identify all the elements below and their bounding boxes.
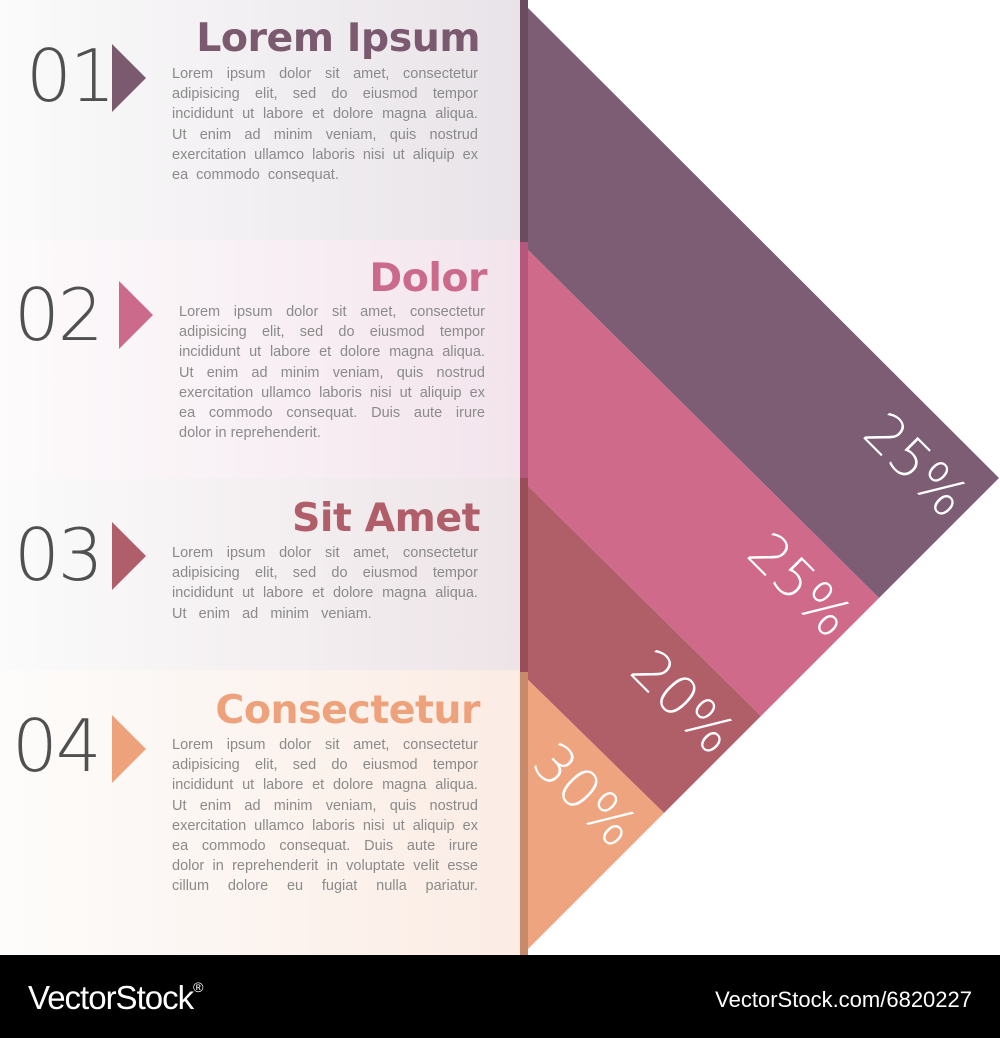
text 03: labore [263,585,303,601]
text 03: dolore [333,585,373,601]
text 01: do [331,86,348,102]
text 01: Lorem [172,66,213,82]
text 02: magna [389,344,433,360]
text 04: dolore [333,777,373,793]
text 04: enim [200,798,231,814]
text 02: tempor [440,324,485,340]
text 02: laboris [319,385,362,401]
text 04: eu [287,878,303,894]
stripe: pink 25%: 25% [735,520,865,650]
arrow 01 [112,44,146,112]
text 02: eiusmod [370,324,425,340]
text 02: enim [207,365,238,381]
text 04: ex [463,818,478,834]
stripe: brown 20% [520,478,761,813]
text 03: magna [382,585,426,601]
text 04: consequat. [279,838,350,854]
text 01: et [312,106,324,122]
text 04: Ut [172,798,186,814]
text 01: tempor [433,86,478,102]
text 04: consectetur [403,737,478,753]
panel: 03 [0,478,521,670]
text 02: ut [249,344,261,360]
text 04: cillum [172,878,209,894]
title 04: Consectetur [215,687,480,733]
text 04: nostrud [430,798,478,814]
text 04: sed [293,757,316,773]
text 04: fugiat [322,878,357,894]
title 01: Lorem Ipsum [196,15,480,61]
text 01: ad [244,127,261,143]
text 02: commodo [209,405,273,421]
text 04: exercitation [172,818,246,834]
text 04: in [213,858,224,874]
text 04: in [327,858,338,874]
text 02: incididunt [179,344,240,360]
text 01: ullamco [254,147,304,163]
footer url: VectorStock.com/6820227 [715,987,972,1012]
text 03: adipisicing [172,565,240,581]
text 02: quis [397,365,423,381]
panel: 04 [0,670,521,955]
stripe: pink 25% [520,242,879,716]
text 01: eiusmod [363,86,418,102]
text 04: nisi [363,818,385,834]
text 01: ea commodo consequat. [172,167,339,183]
text 04 [172,737,478,894]
text 04: dolor [172,858,204,874]
text 04: reprehenderit [232,858,318,874]
text 04: ullamco [254,818,304,834]
stripe: brown 20%: 20% [618,637,748,767]
number 01: 01 [26,34,114,118]
text 03: sed [293,565,316,581]
text 01: labore [263,106,303,122]
text 04: ea [172,838,188,854]
footer brand: VectorStock® [28,979,202,1016]
text 04: sit [325,737,339,753]
text 01: sed [293,86,316,102]
text 04: veniam, [326,798,376,814]
text 01: enim [200,127,231,143]
text 01: dolor [279,66,311,82]
text 03: sit [325,545,339,561]
text 03: do [331,565,348,581]
text 04: ad [244,798,261,814]
text 02: ullamco [261,385,311,401]
text 01: minim [274,127,312,143]
text 03: consectetur [403,545,478,561]
text 02: do [338,324,355,340]
text 02: ea [179,405,195,421]
text 01: veniam, [326,127,376,143]
text 04: et [312,777,324,793]
text 02: veniam, [333,365,383,381]
text 02: dolor in reprehenderit. [179,425,321,441]
text 04: laboris [312,818,355,834]
text 03: tempor [433,565,478,581]
text 01 [172,66,478,183]
text 04: dolore [228,878,268,894]
title 02: Dolor [369,255,487,301]
text 02: aliquip [420,385,462,401]
text 04: commodo [202,838,266,854]
text 04: labore [263,777,303,793]
text 04: dolor [279,737,311,753]
title 03: Sit Amet [292,495,480,541]
text 04: Lorem [172,737,213,753]
text 04: tempor [433,757,478,773]
footer [0,955,1000,1038]
text 02: dolor [286,304,318,320]
text 02: Duis [371,405,400,421]
text 01: nostrud [430,127,478,143]
text 02: Ut [179,365,194,381]
text 02: et [319,344,331,360]
text 01: exercitation [172,147,246,163]
text 04: ipsum [227,737,265,753]
text 04: minim [274,798,312,814]
text 01: incididunt [172,106,233,122]
text 01: sit [325,66,339,82]
text 04: pariatur. [426,878,478,894]
arrow 02 [119,281,153,349]
text 03: incididunt [172,585,233,601]
text 02: ut [400,385,412,401]
text 04: Duis [364,838,393,854]
text 01: dolore [333,106,373,122]
stripe: orange 30%: 30% [520,730,650,860]
text 04: adipisicing [172,757,240,773]
text 01: quis [390,127,416,143]
text 01: ex [463,147,478,163]
text 02: ex [470,385,485,401]
text 02: amet, [360,304,396,320]
text 02: consectetur [410,304,485,320]
text 01: ipsum [227,66,265,82]
text 03: et [312,585,324,601]
arrow 03 [112,522,146,590]
text 04: quis [390,798,416,814]
text 02: minim [281,365,319,381]
text 04: aute [407,838,435,854]
text 03: aliqua. [435,585,478,601]
text 01: Ut [172,127,186,143]
text 02: Lorem [179,304,220,320]
text 04: eiusmod [363,757,418,773]
text 01: aliquip [413,147,455,163]
text 02: aliqua. [442,344,485,360]
text 02: ad [251,365,268,381]
text 03 [172,545,478,622]
number 03: 03 [14,513,102,597]
text 01: amet, [353,66,389,82]
text 02 [179,304,485,441]
text 04: esse [447,858,478,874]
text 02: irure [456,405,485,421]
text 02: nostrud [437,365,485,381]
text 04: aliqua. [435,777,478,793]
text 04: amet, [353,737,389,753]
text 04: elit, [255,757,278,773]
text 02: consequat. [286,405,357,421]
text 03: amet, [353,545,389,561]
text 04: ut [393,818,405,834]
text 03: Lorem [172,545,213,561]
number 02: 02 [14,273,102,357]
text 01: consectetur [403,66,478,82]
text 01: ut [242,106,254,122]
text 01: adipisicing [172,86,240,102]
text 02: labore [270,344,310,360]
text 03: ut [242,585,254,601]
stripe: purple 25% [520,0,999,598]
text 02: nisi [370,385,392,401]
text 03: elit, [255,565,278,581]
panel: 01 [0,0,521,240]
text 04: irure [449,838,478,854]
text 02: adipisicing [179,324,247,340]
text 04: voluptate [346,858,405,874]
text 04: do [331,757,348,773]
text 02: sed [300,324,323,340]
text 01: elit, [255,86,278,102]
text 01: aliqua. [435,106,478,122]
text 03: Ut enim ad minim veniam. [172,606,372,622]
number 04: 04 [12,704,100,788]
text 03: dolor [279,545,311,561]
panel: 02 [0,240,521,478]
stripe: purple 25%: 25% [851,400,981,530]
text 03: ipsum [227,545,265,561]
text 02: aute [414,405,442,421]
text 02: exercitation [179,385,253,401]
text 01: magna [382,106,426,122]
text 03: eiusmod [363,565,418,581]
text 02: elit, [262,324,285,340]
stripe: orange 30% [520,672,664,955]
text 01: nisi [363,147,385,163]
text 02: sit [332,304,346,320]
text 02: dolore [340,344,380,360]
text 02: ipsum [234,304,272,320]
text 04: velit [413,858,439,874]
text 04: magna [382,777,426,793]
text 01: ut [393,147,405,163]
text 01: laboris [312,147,355,163]
text 04: ut [242,777,254,793]
text 04: aliquip [413,818,455,834]
text 04: nulla [376,878,407,894]
arrow 04 [112,715,146,783]
text 04: incididunt [172,777,233,793]
